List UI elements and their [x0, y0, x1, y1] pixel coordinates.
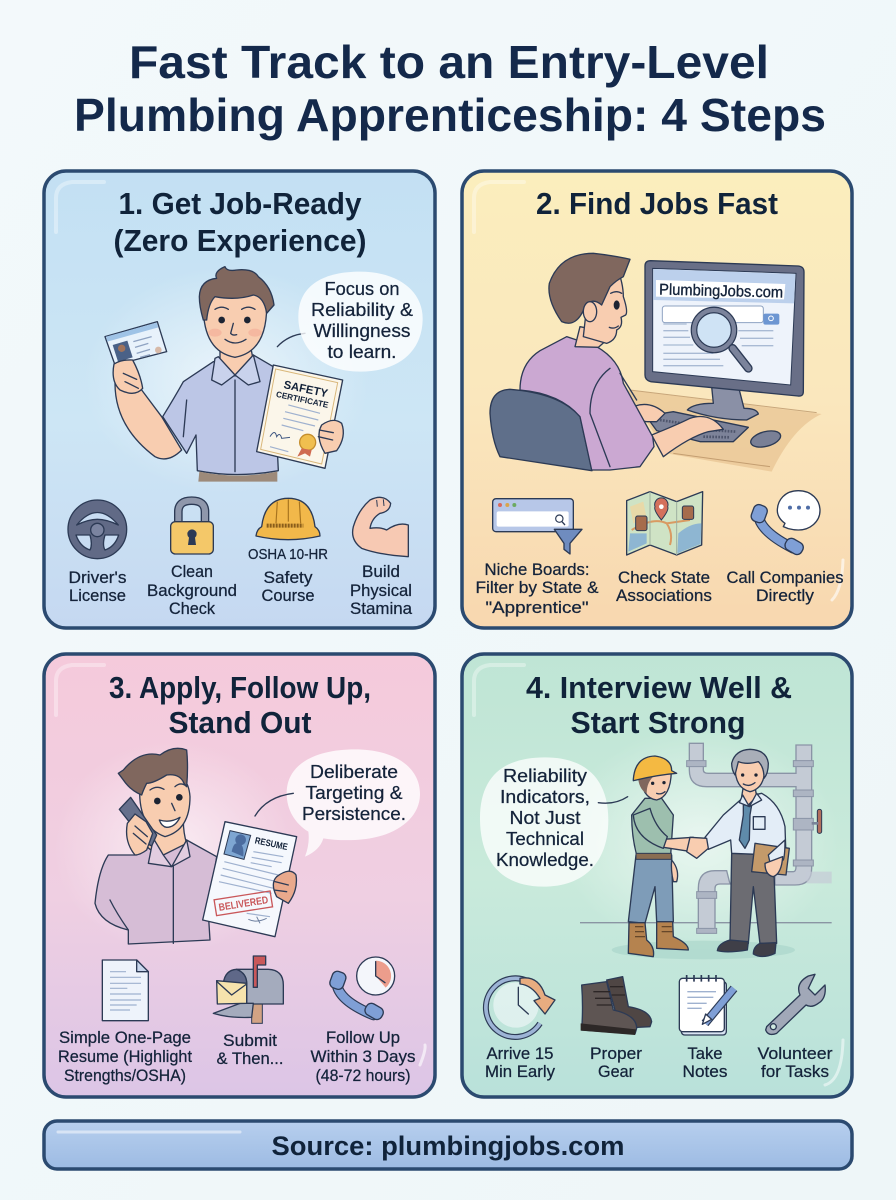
icon: padlock	[171, 501, 213, 554]
site name: PlumbingJobs.com	[659, 281, 783, 302]
heading	[526, 670, 792, 740]
speech bubble text	[496, 765, 594, 870]
feature labels: Safety	[264, 569, 313, 587]
heading: Start Strong	[570, 705, 746, 740]
icon: work boots	[581, 977, 652, 1035]
feature labels: "Apprentice"	[486, 599, 589, 617]
feature labels: Gear	[598, 1063, 634, 1081]
feature labels: Driver's	[68, 569, 126, 587]
safety certificate: CERTIFICATE	[275, 389, 330, 410]
feature labels: Build	[362, 563, 400, 581]
speech bubble text: Deliberate	[310, 761, 398, 782]
feature labels: Follow Up	[326, 1029, 400, 1047]
feature labels: Filter by State &	[476, 579, 598, 597]
resume	[203, 822, 297, 937]
title: Plumbing Apprenticeship: 4 Steps	[74, 89, 826, 141]
feature labels: Volunteer	[758, 1045, 833, 1063]
title	[74, 36, 826, 141]
feature labels: for Tasks	[761, 1063, 829, 1081]
icon: hard hat	[256, 498, 320, 540]
panel: 3. Apply, Follow Up, Stand Out	[44, 654, 435, 1097]
icon: phone and speech bubble	[750, 491, 820, 556]
icon: mailbox with envelope	[213, 956, 283, 1023]
heading	[114, 186, 366, 258]
feature labels	[476, 561, 844, 617]
icon: steering wheel	[68, 500, 127, 559]
feature labels: Clean	[171, 563, 213, 581]
feature labels: & Then...	[216, 1050, 284, 1068]
feature labels: Take	[688, 1045, 722, 1063]
title: Fast Track to an Entry-Level	[129, 36, 769, 88]
heading	[109, 670, 371, 740]
speech bubble text: Willingness	[314, 320, 410, 341]
feature labels: Proper	[590, 1045, 643, 1063]
icon: wrench	[766, 974, 825, 1034]
speech bubble text: Technical	[506, 828, 584, 849]
speech bubble text	[302, 761, 406, 824]
illustration: man on phone holding resume	[53, 740, 420, 953]
feature labels: Directly	[756, 587, 815, 605]
feature labels: Min Early	[485, 1063, 556, 1081]
speech bubble text: Indicators,	[500, 786, 590, 807]
safety certificate: SAFETY	[283, 379, 329, 400]
speech bubble text: Reliability &	[311, 299, 414, 320]
icon: state map	[627, 492, 703, 555]
heading: (Zero Experience)	[114, 223, 366, 258]
feature labels	[485, 1045, 833, 1081]
apprentice	[628, 756, 700, 957]
speech bubble text: Focus on	[324, 278, 400, 299]
feature labels: (48-72 hours)	[316, 1067, 410, 1085]
speech bubble text: Targeting &	[306, 782, 403, 803]
feature labels: Notes	[682, 1063, 728, 1081]
feature labels	[68, 546, 413, 618]
speech bubble text: Persistence.	[302, 803, 406, 824]
feature labels: Associations	[616, 587, 712, 605]
feature labels: Niche Boards:	[484, 561, 590, 579]
heading: 1. Get Job-Ready	[118, 186, 362, 221]
feature labels: Resume (Highlight	[58, 1048, 192, 1066]
heading: Stand Out	[168, 705, 312, 740]
feature labels: Call Companies	[726, 569, 844, 587]
illustration: man searching job board at computer	[490, 253, 822, 472]
feature labels: Check	[169, 600, 216, 618]
feature labels: Physical	[350, 582, 412, 600]
speech bubble text: Knowledge.	[496, 849, 594, 870]
feature labels: Background	[147, 582, 237, 600]
feature labels	[58, 1029, 416, 1085]
illustration: man holding ID card and safety certificate	[83, 267, 423, 493]
speech bubble	[480, 757, 608, 887]
feature labels: Strengths/OSHA)	[64, 1067, 186, 1085]
resume: BELIVERED	[218, 895, 270, 914]
feature labels: Check State	[618, 569, 710, 587]
feature labels: Stamina	[350, 600, 413, 618]
source bar	[44, 1121, 852, 1169]
supervisor	[687, 749, 789, 957]
feature labels: Arrive 15	[486, 1045, 554, 1063]
speech bubble text: to learn.	[328, 341, 396, 362]
safety certificate	[257, 365, 343, 468]
icon: search filter	[493, 499, 582, 554]
feature labels: Submit	[223, 1032, 277, 1050]
speech bubble text	[311, 278, 414, 362]
panel: 1. Get Job-Ready	[44, 171, 435, 628]
panel: 4. Interview Well & Start Strong	[462, 654, 852, 1097]
icon: one-page resume document	[102, 960, 148, 1021]
illustration: handshake between apprentice and supervisor with pipes	[480, 727, 840, 959]
speech bubble text: Reliability	[503, 765, 588, 786]
resume: RESUME	[254, 835, 289, 852]
source bar: Source: plumbingjobs.com	[272, 1131, 624, 1161]
heading: 3. Apply, Follow Up,	[109, 670, 371, 705]
feature labels: License	[69, 587, 126, 605]
icon: phone and clock	[328, 957, 395, 1021]
id card	[105, 322, 167, 365]
icon: flexed arm	[353, 497, 408, 557]
feature labels: OSHA 10-HR	[248, 546, 328, 563]
feature labels: Simple One-Page	[59, 1029, 191, 1047]
heading: 4. Interview Well &	[526, 670, 792, 705]
icon: clock with arrow	[486, 978, 555, 1037]
feature labels: Within 3 Days	[310, 1048, 416, 1066]
speech bubble text: Not Just	[510, 807, 580, 828]
speech bubble	[287, 749, 420, 857]
icon: notepad and pen	[679, 975, 734, 1035]
panel: 2. Find Jobs Fast	[462, 171, 852, 628]
feature labels: Course	[262, 587, 314, 605]
heading: 2. Find Jobs Fast	[536, 186, 778, 221]
speech bubble	[298, 272, 423, 372]
